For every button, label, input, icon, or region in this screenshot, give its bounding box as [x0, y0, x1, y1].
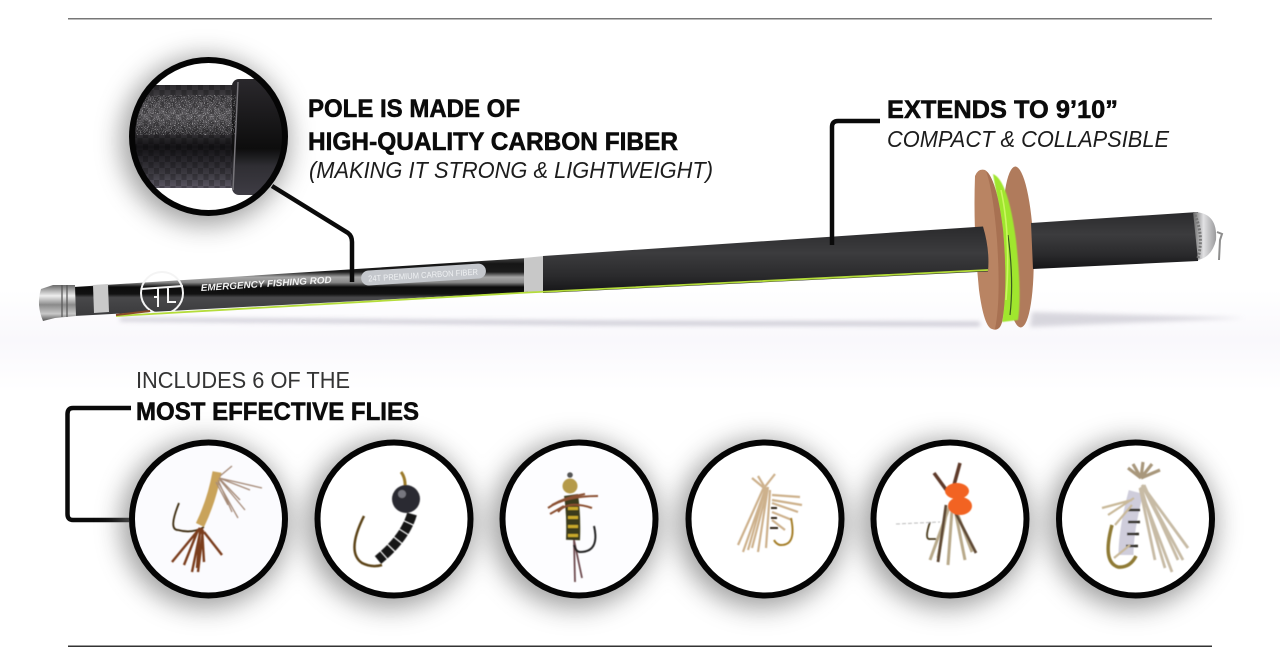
top rule	[68, 18, 1212, 20]
magnifier shadow	[121, 57, 289, 225]
green line on rod	[116, 270, 988, 316]
line spool	[974, 166, 1036, 330]
silver label pill: 24T PREMIUM CARBON FIBER	[368, 267, 478, 284]
callout: flies bracket	[68, 408, 131, 520]
heading: carbon fiber: POLE IS MADE OF	[308, 95, 520, 123]
heading: carbon fiber: (MAKING IT STRONG & LIGHTWEIGHT)	[309, 157, 713, 183]
rod shadow	[120, 312, 1245, 327]
metal tip cap	[39, 285, 76, 321]
magnifier: carbon fiber detail	[130, 60, 292, 213]
end cap	[1193, 212, 1216, 260]
fly circle shadows	[121, 440, 1216, 608]
fishing rod	[39, 212, 1222, 321]
fly 3	[502, 442, 656, 596]
rod thin section	[74, 258, 528, 316]
fly 6	[1059, 442, 1212, 596]
heading: carbon fiber	[308, 95, 713, 183]
rod thick section left of spool	[543, 226, 988, 293]
heading: extends	[887, 96, 1169, 152]
heading: extends: COMPACT & COLLAPSIBLE	[887, 126, 1169, 152]
heading: flies: INCLUDES 6 OF THE	[136, 367, 350, 393]
bottom rule	[68, 646, 1212, 647]
fly 1	[132, 442, 285, 596]
callout: carbon fiber leader	[272, 186, 352, 282]
heading: flies	[136, 367, 419, 426]
fly 2	[318, 442, 470, 596]
logo circle	[141, 272, 183, 314]
spool line	[993, 174, 1020, 322]
spool near disc	[974, 170, 1005, 330]
heading: flies: MOST EFFECTIVE FLIES	[136, 398, 419, 426]
rod label: EMERGENCY FISHING ROD	[200, 275, 332, 294]
spool far disc	[1000, 166, 1036, 328]
rod thick section right of spool	[1031, 212, 1200, 269]
fly 5	[874, 442, 1026, 596]
silver band left	[93, 284, 109, 313]
heading: extends: EXTENDS TO 9’10”	[887, 96, 1118, 124]
callout: extends leader	[832, 121, 880, 245]
fly 4	[688, 442, 842, 596]
silver band mid	[524, 256, 544, 292]
heading: carbon fiber: HIGH-QUALITY CARBON FIBER	[308, 128, 678, 156]
